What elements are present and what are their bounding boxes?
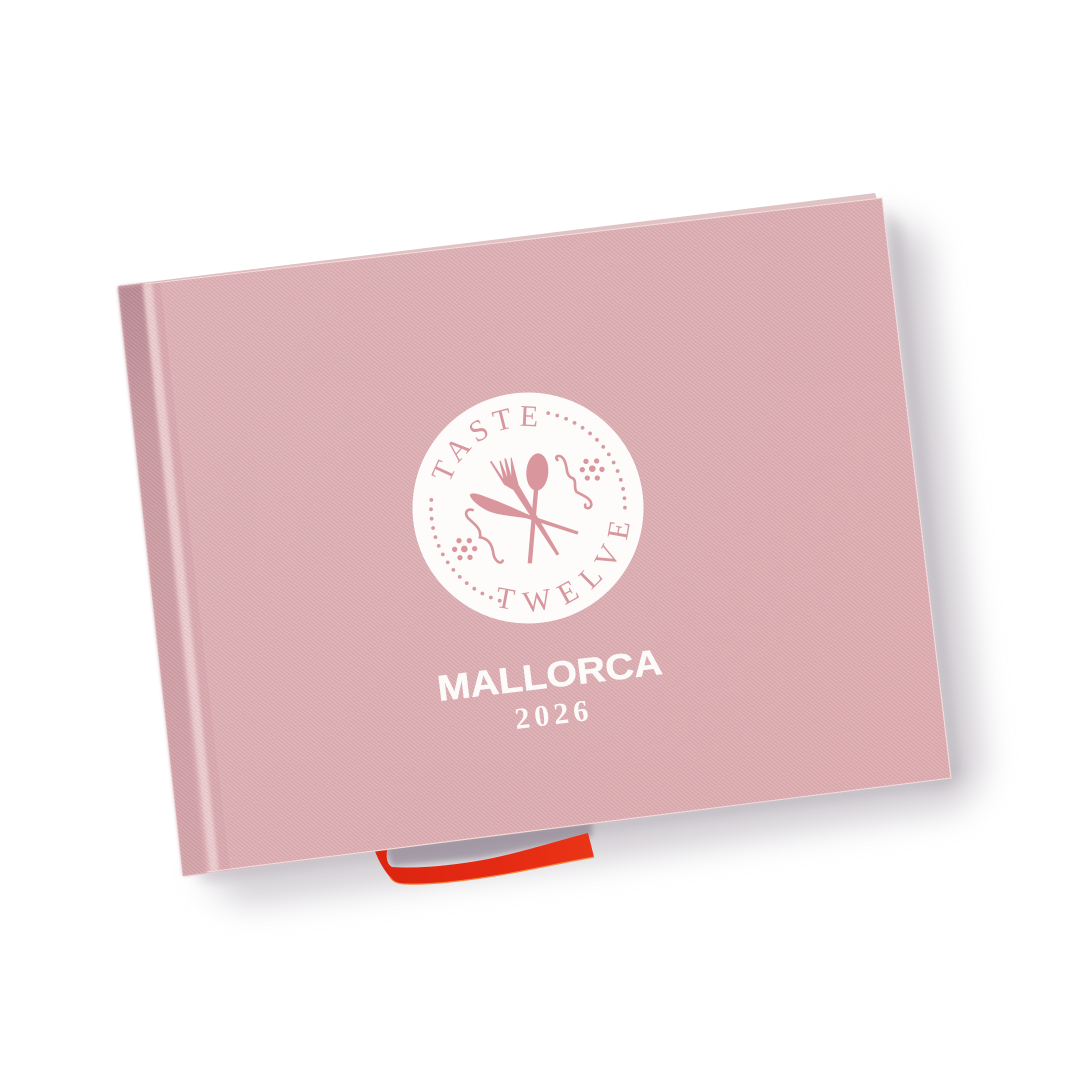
badge wordmark: TWELVE: TWELVE: [498, 522, 630, 612]
icon: left dot cluster: [452, 538, 477, 560]
badge wordmark: TASTE: TASTE: [431, 406, 536, 480]
icon: fork: [490, 458, 559, 556]
hinge groove: [143, 282, 230, 872]
ribbon shadow: [385, 818, 592, 866]
spine: [118, 284, 206, 876]
icon: spoon: [525, 453, 550, 563]
icon: knife: [470, 493, 579, 535]
icon: right dot cluster: [580, 458, 605, 481]
back cover top edge: [140, 193, 877, 288]
red ribbon bookmark: [375, 833, 594, 884]
linen texture: [118, 198, 951, 876]
badge dotted ring: [431, 413, 625, 601]
hinge highlight: [142, 283, 219, 872]
icon: crossed cutlery: [452, 453, 605, 563]
book shadow: [195, 205, 982, 902]
logo badge: [412, 392, 644, 624]
book front cover: [100, 180, 970, 890]
linen noise: [145, 208, 940, 870]
title: MALLORCA: MALLORCA: [435, 641, 664, 709]
year: 2026: 2026: [513, 694, 595, 736]
cover edge highlight: [145, 198, 951, 872]
product photo: pink linen book: [116, 193, 996, 916]
icon: right flourish: [556, 456, 591, 508]
icon: left flourish: [466, 510, 503, 563]
